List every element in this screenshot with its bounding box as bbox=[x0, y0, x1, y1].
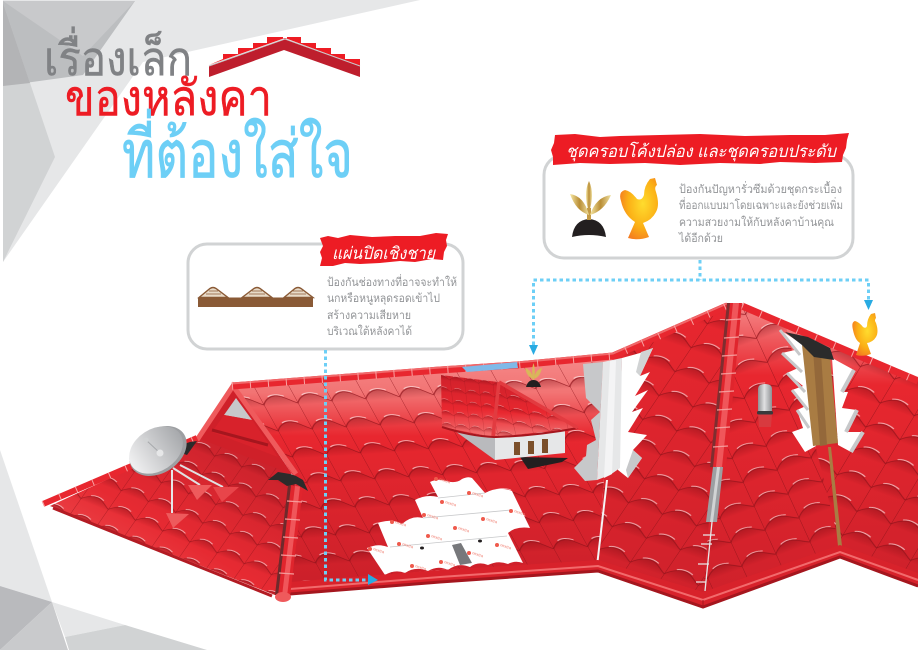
icon: finial on roof bbox=[525, 363, 542, 387]
heading banner bbox=[320, 233, 448, 266]
title bbox=[44, 26, 353, 191]
roof face: left hip bbox=[50, 400, 296, 597]
underlay sheet: nextra bbox=[427, 512, 440, 521]
background: top-left grey facets bbox=[3, 0, 420, 262]
description text bbox=[327, 274, 457, 338]
illustration: tiled roof bbox=[43, 303, 918, 608]
description text bbox=[678, 181, 843, 245]
valley flashing: white metal bbox=[574, 348, 653, 566]
title line 1: เรื่องเล็ก bbox=[44, 26, 192, 85]
dormer bbox=[441, 375, 578, 469]
description text: นกหรือหนูหลุดรอดเข้าไป bbox=[327, 292, 440, 305]
underlay sheet: nextra bbox=[500, 542, 513, 551]
dormer side wall bbox=[455, 431, 495, 460]
panel frame bbox=[188, 244, 463, 349]
underlay sheet: nextra bbox=[415, 563, 428, 572]
icon: stepped roof logo bbox=[209, 37, 360, 77]
underlay sheet: nextra bbox=[486, 516, 499, 525]
ridge line bbox=[43, 304, 918, 504]
hip ridge cap with black seal bbox=[268, 472, 308, 602]
underlay sheet: nextra bbox=[402, 541, 415, 550]
description text: ป้องกันปัญหารั่วซึมด้วยชุดกระเบื้อง bbox=[679, 181, 842, 196]
description text: ที่ออกแบบมาโดยเฉพาะและยังช่วยเพิ่ม bbox=[679, 197, 843, 212]
underlay grey strip bbox=[452, 543, 472, 565]
roof face: centre-right slope bbox=[703, 303, 840, 594]
skylight strip bbox=[462, 362, 518, 372]
arrow: rooster bbox=[864, 300, 873, 310]
centre hip ridge cap bbox=[696, 303, 742, 591]
panel frame bbox=[544, 155, 853, 258]
underlay sheet: nextra bbox=[439, 476, 452, 485]
description text: ความสวยงามให้กับหลังคาบ้านคุณ bbox=[679, 216, 834, 229]
description text: สร้างความเสียหาย bbox=[327, 309, 411, 322]
dormer shadow bbox=[520, 457, 568, 469]
dormer front wall bbox=[495, 431, 565, 460]
description text: ได้อีกด้วย bbox=[678, 232, 723, 245]
panel: eave closure bbox=[188, 233, 463, 349]
underlay sheet: nextra bbox=[395, 519, 408, 528]
underlay sheet: nextra bbox=[472, 490, 485, 499]
heading banner: ชุดครอบโค้งปล่อง และชุดครอบประดับ bbox=[566, 141, 837, 162]
icon: golden rooster bbox=[620, 178, 658, 239]
icon: eave closure strip bbox=[198, 288, 313, 307]
underlay sheet bbox=[367, 476, 530, 575]
description text: บริเวณใต้หลังคาได้ bbox=[327, 325, 412, 338]
dotted leader: caps bbox=[534, 260, 868, 345]
dormer windows bbox=[514, 439, 548, 455]
satellite dish bbox=[120, 416, 239, 528]
eave board bbox=[290, 545, 918, 608]
small black seal at gable bbox=[181, 441, 197, 455]
gable bbox=[197, 386, 296, 474]
roof face: main slope bbox=[232, 353, 613, 584]
arrow: eave closure bbox=[368, 574, 378, 585]
heading banner bbox=[551, 133, 849, 165]
valley black cap bbox=[785, 332, 834, 360]
icon: rooster on roof bbox=[852, 313, 878, 356]
underlay sheet: nextra bbox=[445, 499, 458, 508]
underlay sheet: nextra bbox=[472, 550, 485, 559]
left eave shadow bbox=[53, 508, 272, 596]
panel: ridge and ornament caps bbox=[544, 133, 853, 258]
underlay sheet: nextra bbox=[444, 559, 457, 568]
roof face: right slope bbox=[785, 322, 918, 574]
vent pipe bbox=[757, 384, 773, 427]
arrow: finial bbox=[529, 345, 538, 355]
dotted leader: eave closure bbox=[326, 350, 368, 580]
description text: ป้องกันช่องทางที่อาจจะทำให้ bbox=[327, 274, 457, 289]
underlay sheet: nextra bbox=[514, 508, 527, 517]
title line 3: ที่ต้องใส่ใจ bbox=[122, 109, 353, 191]
underlay sheet: nextra bbox=[373, 546, 386, 555]
underlay sheet: nextra bbox=[458, 525, 471, 534]
background: bottom-left grey facets bbox=[0, 450, 207, 650]
roof face: valley slope bbox=[598, 303, 727, 600]
underlay sheet: nextra bbox=[431, 533, 444, 542]
heading banner: แผ่นปิดเชิงชาย bbox=[332, 244, 436, 263]
title line 2: ของหลังคา bbox=[65, 72, 272, 126]
right valley: brown metal bbox=[780, 330, 863, 546]
icon: gold finial bbox=[570, 181, 611, 237]
